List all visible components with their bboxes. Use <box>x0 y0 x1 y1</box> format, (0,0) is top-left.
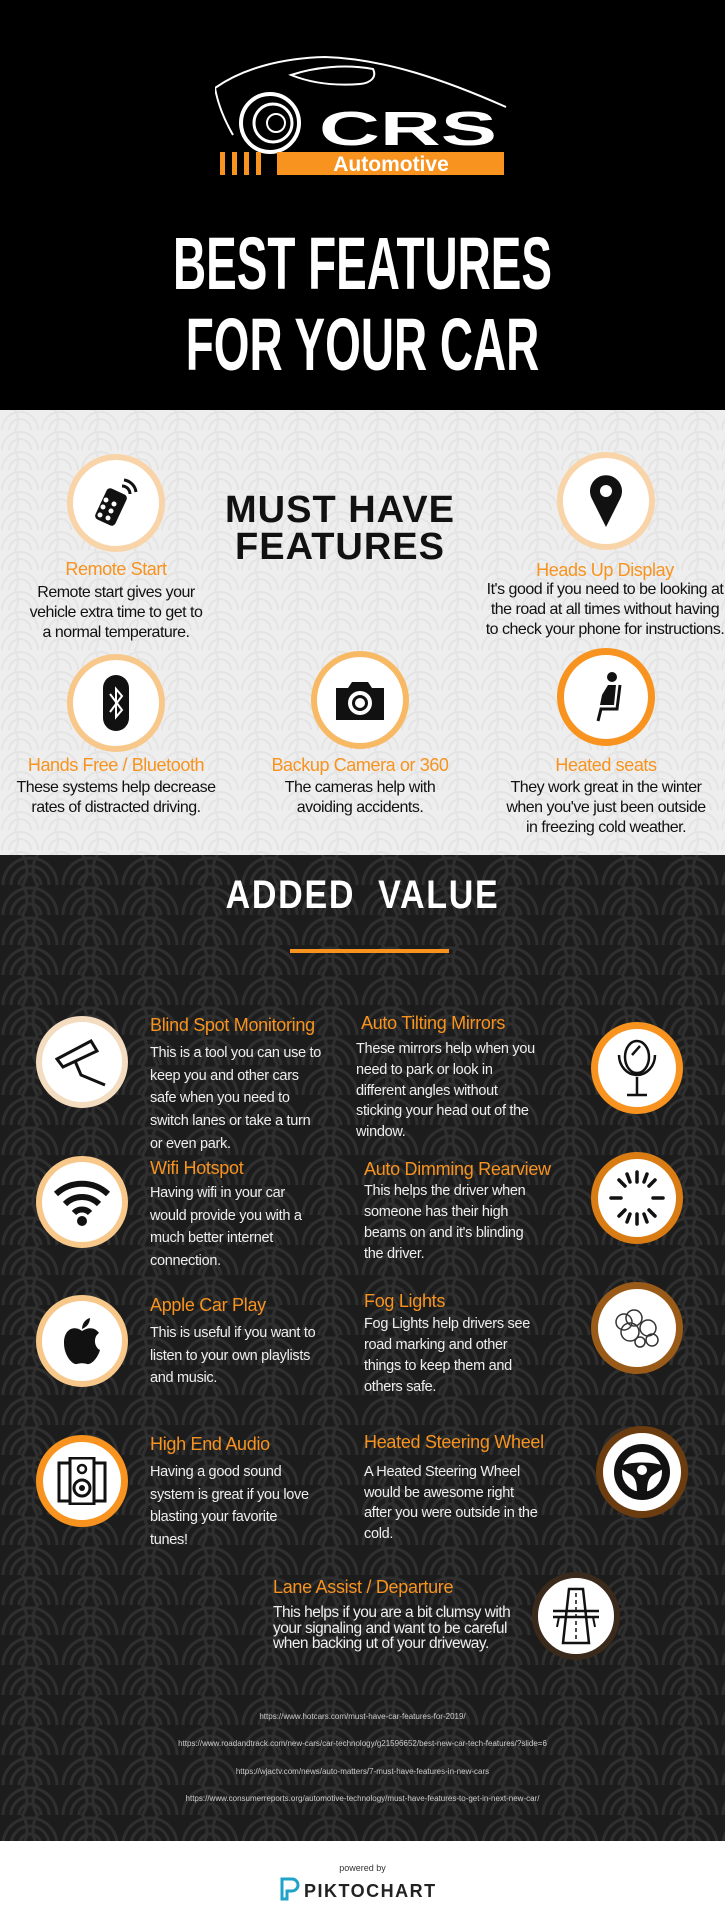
text: heated seat <box>506 755 706 836</box>
icon: mirror <box>591 1022 683 1114</box>
text: dimming: beams on and it's blinding <box>364 1225 523 1241</box>
icon: dimming <box>591 1152 683 1244</box>
text: blind spot: or even park. <box>150 1136 231 1152</box>
text: heads up display: the road at all times without having <box>491 601 719 618</box>
text: remote start: a normal temperature. <box>43 624 189 641</box>
icon: blind spot <box>36 1016 128 1108</box>
text: heated seat: They work great in the winter <box>511 779 701 796</box>
text: fog lights: others safe. <box>364 1379 436 1395</box>
text: mirror: different angles without <box>356 1083 498 1099</box>
text: remote start: Remote start gives your <box>37 584 195 601</box>
text: lane assist <box>273 1577 510 1652</box>
icon: steering wheel <box>596 1426 688 1518</box>
panel: must have features <box>0 410 725 855</box>
text: fog lights <box>364 1291 530 1395</box>
icon: heads up display <box>557 452 655 550</box>
text: heated seat: when you've just been outside <box>506 799 706 816</box>
text: mirror <box>356 1013 535 1140</box>
heading: added value: ADDED VALUE <box>226 873 499 917</box>
text: audio: Having a good sound <box>150 1464 281 1480</box>
text: apple: and music. <box>150 1370 217 1386</box>
text: fog lights: Fog Lights <box>364 1291 445 1311</box>
text: apple: This is useful if you want to <box>150 1325 315 1341</box>
text: heads up display <box>486 560 724 638</box>
text: blind spot: switch lanes or take a turn <box>150 1113 310 1129</box>
text: bluetooth: Hands Free / Bluetooth <box>28 755 204 775</box>
text: lane assist: your signaling and want to be careful <box>273 1620 507 1636</box>
heading: must have features: MUST HAVE <box>225 489 455 531</box>
footer: piktochart: PIKTOCHART <box>304 1881 437 1901</box>
text: steering wheel <box>364 1432 544 1542</box>
sources: https://www.roadandtrack.com/new-cars/car-technology/g21596652/best-new-car-tech-features/?slide=6 <box>178 1739 547 1748</box>
text: heads up display: It's good if you need to be looking at <box>487 581 723 598</box>
text: wifi: Having wifi in your car <box>150 1185 285 1201</box>
heading: must have features <box>225 489 455 568</box>
icon: apple <box>36 1295 128 1387</box>
text: mirror: These mirrors help when you <box>356 1041 535 1057</box>
text: apple: Apple Car Play <box>150 1295 266 1315</box>
text: lane assist: Lane Assist / Departure <box>273 1577 453 1597</box>
text: remote start: Remote Start <box>65 559 167 579</box>
text: lane assist: This helps if you are a bit clumsy with <box>273 1604 510 1621</box>
text: steering wheel: A Heated Steering Wheel <box>364 1464 520 1480</box>
icon: wifi <box>36 1156 128 1248</box>
text: blind spot: This is a tool you can use to <box>150 1045 321 1061</box>
panel: added value <box>0 855 725 1841</box>
text: fog lights: things to keep them and <box>364 1358 512 1374</box>
text: steering wheel: cold. <box>364 1526 393 1542</box>
text: dimming: the driver. <box>364 1246 424 1262</box>
sources: https://www.hotcars.com/must-have-car-features-for-2019/ <box>259 1712 466 1721</box>
text: mirror: window. <box>356 1124 406 1140</box>
text: dimming <box>364 1159 551 1262</box>
text: dimming: This helps the driver when <box>364 1183 525 1199</box>
text: mirror: Auto Tilting Mirrors <box>361 1013 505 1033</box>
logo <box>215 56 506 176</box>
text: fog lights: road marking and other <box>364 1337 507 1353</box>
text: audio: system is great if you love <box>150 1487 309 1503</box>
text: heated seat: Heated seats <box>555 755 657 775</box>
text: wifi: Wifi Hotspot <box>150 1158 243 1178</box>
text: dimming: Auto Dimming Rearview <box>364 1159 551 1179</box>
text: steering wheel: after you were outside in the <box>364 1505 537 1521</box>
text: mirror: sticking your head out of the <box>356 1103 529 1119</box>
sources <box>178 1712 547 1803</box>
text: remote start: vehicle extra time to get to <box>30 604 202 621</box>
logo: Automotive <box>333 153 449 176</box>
text: heads up display: Heads Up Display <box>536 560 674 580</box>
text: steering wheel: Heated Steering Wheel <box>364 1432 544 1452</box>
icon: audio <box>36 1435 128 1527</box>
text: camera: The cameras help with <box>285 779 435 796</box>
text: blind spot: keep you and other cars <box>150 1068 299 1084</box>
text: audio: blasting your favorite <box>150 1509 277 1525</box>
text: camera <box>271 755 449 816</box>
text: blind spot <box>150 1015 321 1152</box>
title: BEST FEATURES <box>173 222 552 305</box>
icon: remote start <box>67 454 165 552</box>
text: bluetooth: rates of distracted driving. <box>31 799 201 816</box>
sources: https://www.consumerreports.org/automotive-technology/must-have-features-to-get-in-next-new-car/ <box>186 1794 539 1803</box>
icon: camera <box>311 651 409 749</box>
text: blind spot: Blind Spot Monitoring <box>150 1015 315 1035</box>
text: lane assist: when backing ut of your driveway. <box>273 1635 489 1652</box>
header panel <box>0 0 725 410</box>
text: audio: tunes! <box>150 1532 188 1548</box>
text: remote start <box>30 559 202 641</box>
text: bluetooth <box>16 755 216 816</box>
icon: fog lights <box>591 1282 683 1374</box>
text: audio: High End Audio <box>150 1434 270 1454</box>
text: camera: Backup Camera or 360 <box>271 755 449 775</box>
title: FOR YOUR CAR <box>186 303 539 386</box>
icon: lane assist <box>532 1572 620 1660</box>
icon: bluetooth <box>67 654 165 752</box>
text: fog lights: Fog Lights help drivers see <box>364 1316 530 1332</box>
text: wifi: would provide you with a <box>150 1208 302 1224</box>
text: wifi: much better internet <box>150 1230 273 1246</box>
text: heads up display: to check your phone for instructions. <box>486 621 724 638</box>
text: bluetooth: These systems help decrease <box>16 779 216 796</box>
text: camera: avoiding accidents. <box>297 799 423 816</box>
text: dimming: someone has their high <box>364 1204 508 1220</box>
icon: heated seat <box>557 648 655 746</box>
text: heated seat: in freezing cold weather. <box>526 819 686 836</box>
text: audio <box>150 1434 309 1548</box>
title <box>173 222 552 386</box>
text: blind spot: safe when you need to <box>150 1090 290 1106</box>
footer: piktochart: powered by <box>339 1863 386 1873</box>
heading: must have features: FEATURES <box>235 526 445 568</box>
text: steering wheel: would be awesome right <box>364 1485 514 1501</box>
text: apple <box>150 1295 316 1386</box>
text: mirror: need to park or look in <box>356 1062 493 1078</box>
text: wifi <box>150 1158 302 1269</box>
sources: https://wjactv.com/news/auto-matters/7-must-have-features-in-new-cars <box>236 1767 489 1776</box>
footer: piktochart <box>0 1841 725 1920</box>
logo: CRS <box>319 103 497 156</box>
text: apple: listen to your own playlists <box>150 1348 310 1364</box>
text: wifi: connection. <box>150 1253 221 1269</box>
